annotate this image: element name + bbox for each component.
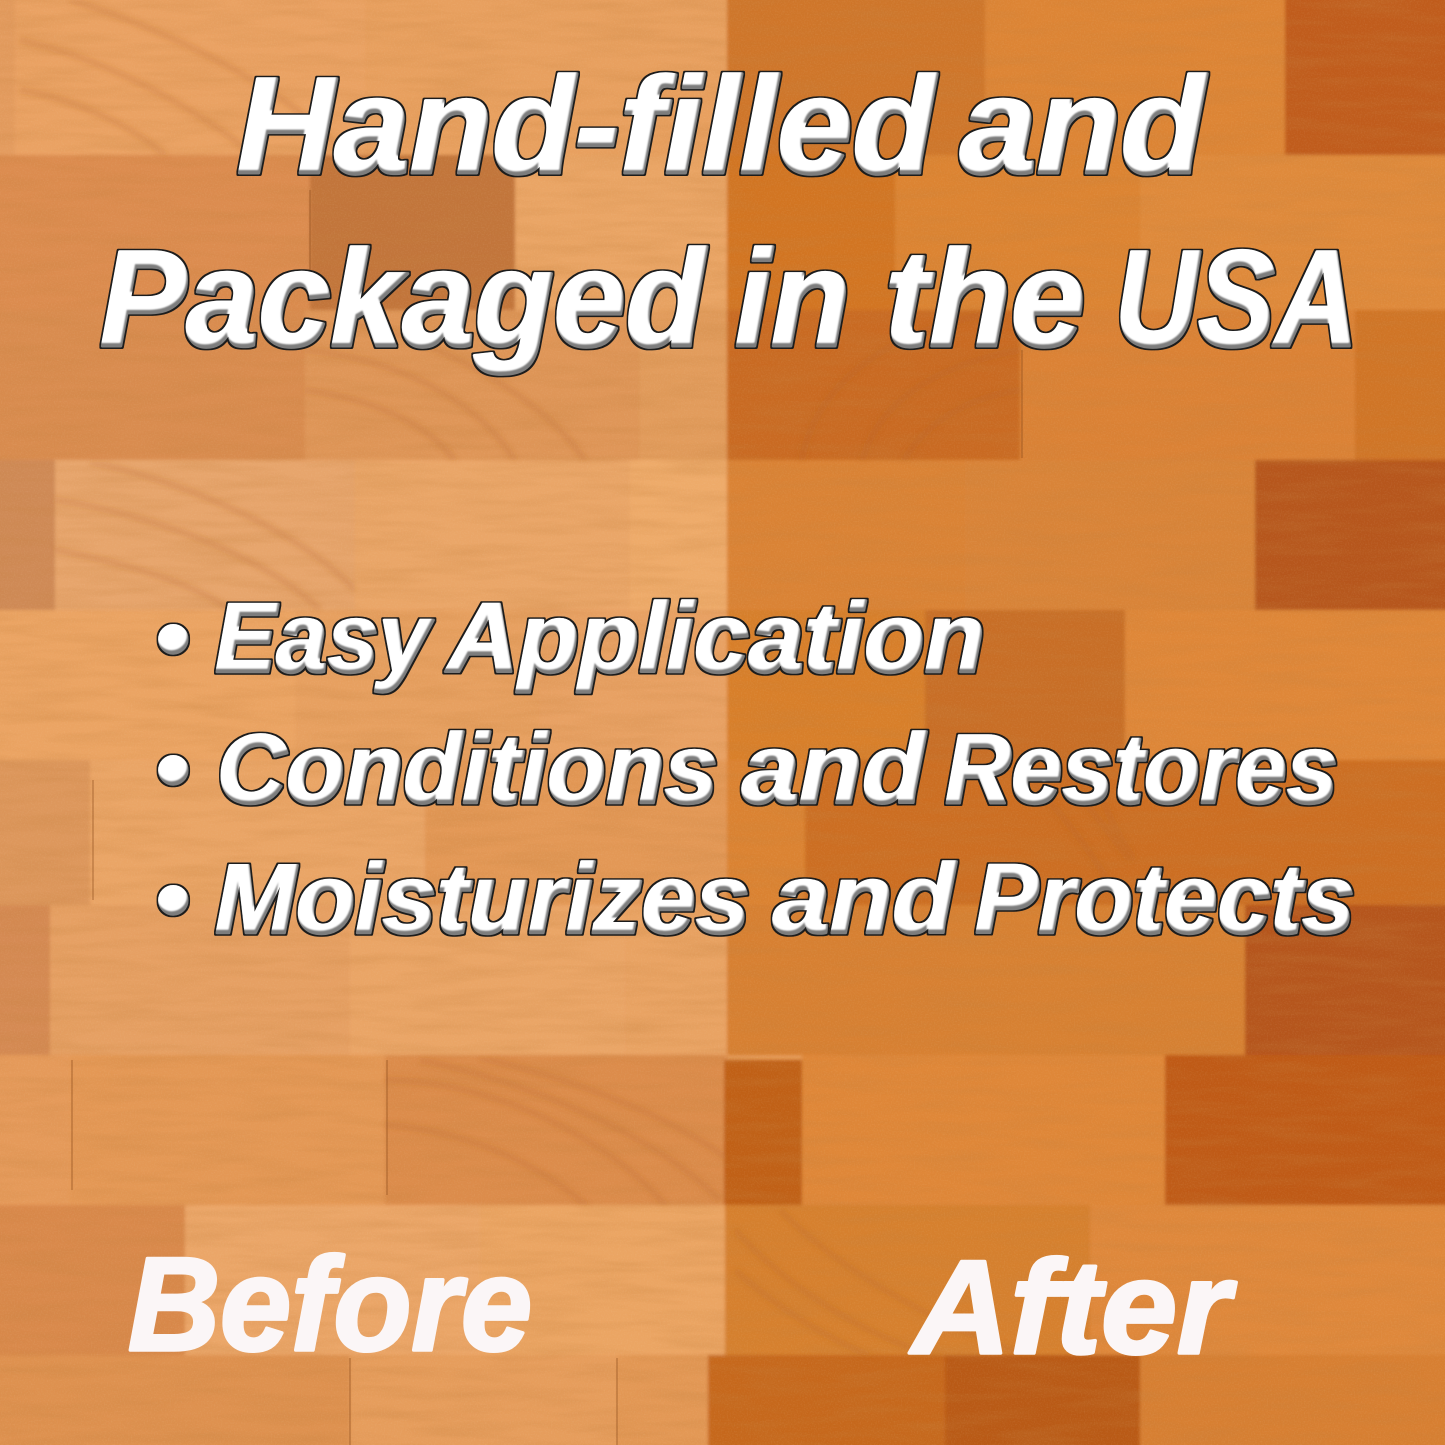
row 1: [0, 0, 15, 155]
label: after: After: [909, 1234, 1236, 1382]
title: USA: [1115, 223, 1358, 376]
benefit: conditions and restores: [155, 714, 1338, 824]
benefit: conditions and restores: and: [742, 714, 927, 824]
benefit: easy application: Easy: [215, 583, 434, 693]
benefit: moisturizes and protects: [155, 844, 1355, 954]
benefit: easy application: Application: [444, 583, 985, 693]
row 6: [0, 760, 90, 905]
benefit: easy application: [155, 583, 985, 693]
benefit: easy application: •: [155, 583, 189, 693]
row 8: [0, 1055, 70, 1205]
title: in: [735, 223, 850, 376]
benefit: moisturizes and protects: and: [773, 844, 957, 954]
benefits list: [155, 583, 1355, 954]
benefit: conditions and restores: Restores: [945, 714, 1338, 824]
row 5: [0, 610, 295, 760]
benefit: conditions and restores: •: [155, 714, 189, 824]
label: before: Before: [128, 1231, 532, 1379]
row 4: [0, 460, 55, 610]
benefit: moisturizes and protects: •: [155, 844, 189, 954]
title: and: [960, 50, 1208, 203]
title: the: [885, 223, 1085, 376]
row 2: [0, 155, 310, 310]
row 10: [0, 1355, 350, 1445]
row 7: [0, 905, 50, 1055]
title: Packaged: [100, 223, 708, 376]
row 3: [0, 310, 305, 460]
benefit: moisturizes and protects: Protects: [975, 844, 1355, 954]
benefit: moisturizes and protects: Moisturizes: [215, 844, 750, 954]
row 9: [0, 1205, 185, 1355]
title: Hand-filled: [237, 50, 938, 203]
benefit: conditions and restores: Conditions: [217, 714, 718, 824]
title: [100, 50, 1358, 376]
